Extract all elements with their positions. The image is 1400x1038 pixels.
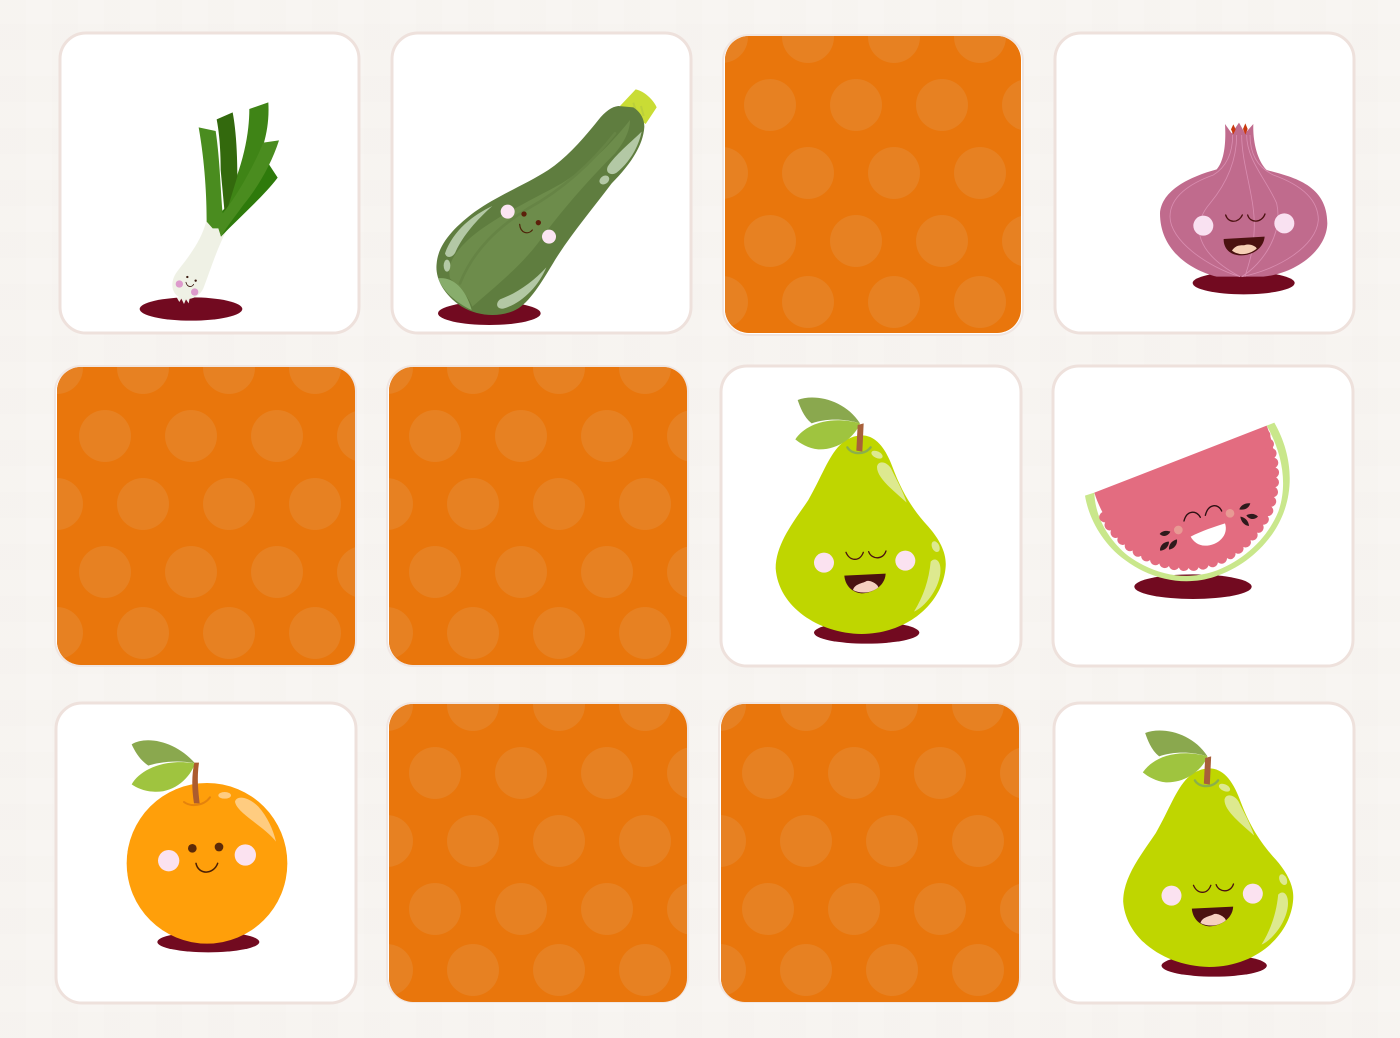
icon: watermelon bbox=[1085, 423, 1290, 599]
card: zucchini bbox=[392, 33, 691, 333]
card: leek bbox=[60, 33, 359, 333]
icon: orange fruit bbox=[127, 740, 287, 952]
card: orange back 5 bbox=[718, 702, 1021, 1003]
card: orange back 2 bbox=[54, 365, 357, 667]
card: watermelon bbox=[1053, 366, 1353, 666]
card: pear bbox=[721, 366, 1021, 666]
icon: zucchini bbox=[436, 89, 657, 325]
card: second pear bbox=[1054, 703, 1354, 1003]
icon: onion bbox=[1160, 123, 1327, 294]
card: orange back 1 bbox=[722, 34, 1024, 336]
card: orange fruit bbox=[56, 703, 356, 1003]
card: orange back 3 bbox=[386, 365, 689, 667]
icon: second pear bbox=[1123, 731, 1293, 977]
icon: leek bbox=[140, 102, 279, 321]
card: onion bbox=[1055, 33, 1354, 333]
icon: pear bbox=[776, 398, 946, 644]
card: orange back 4 bbox=[386, 702, 689, 1003]
